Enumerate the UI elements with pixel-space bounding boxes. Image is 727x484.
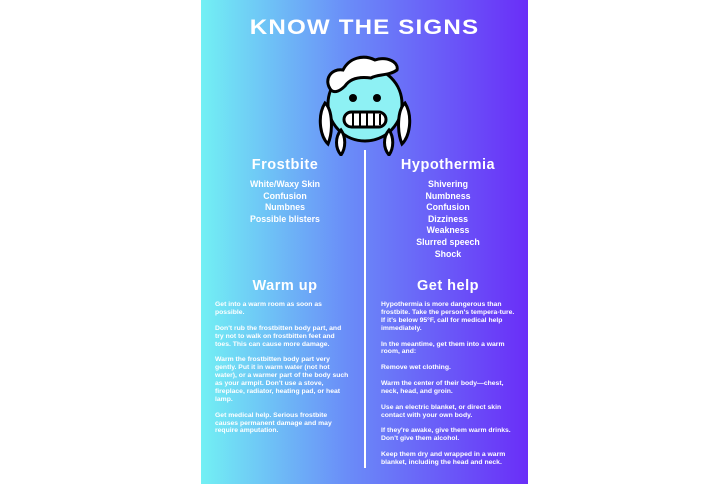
text: get help: Warm the center of their body—chest, neck, head, and groin. — [381, 380, 504, 395]
text: get help: Hypothermia is more dangerous than frostbite. Take the person's tempera-ture. If it's below 95°F, call for medical help immediately. — [381, 301, 514, 332]
list: hypothermia signs: Slurred speech — [416, 237, 480, 247]
text: get help: Keep them dry and wrapped in a warm blanket, including the head and neck. — [381, 451, 505, 466]
text: warm up: Don't rub the frostbitten body part, and try not to walk on frostbitten feet and toes. This can cause more damage. — [215, 325, 341, 348]
list: hypothermia signs: Shock — [435, 249, 461, 259]
panel: background — [201, 0, 528, 484]
list: hypothermia signs — [416, 179, 480, 259]
list: frostbite signs: White/Waxy Skin — [250, 179, 320, 189]
list: frostbite signs — [250, 179, 320, 224]
list: hypothermia signs: Weakness — [427, 225, 469, 235]
list: frostbite signs: Possible blisters — [250, 214, 320, 224]
heading: Hypothermia: Hypothermia — [401, 157, 495, 173]
list: hypothermia signs: Dizziness — [428, 214, 468, 224]
text: warm up: Warm the frostbitten body part very gently. Put it in warm water (not hot water), or a warmer part of the body such as your armpit. Don't use a stove, fireplace, radiator, heating pad, or heat lamp. — [215, 356, 348, 403]
text: warm up: Get into a warm room as soon as possible. — [215, 301, 322, 316]
list: hypothermia signs: Shivering — [428, 179, 468, 189]
text: warm up — [215, 301, 348, 434]
text: get help: If they're awake, give them warm drinks. Don't give them alcohol. — [381, 427, 511, 442]
text: warm up: Get medical help. Serious frostbite causes permanent damage and may require amputation. — [215, 412, 332, 434]
text: get help: Use an electric blanket, or direct skin contact with your own body. — [381, 404, 501, 419]
heading: Get help: Get help — [417, 278, 479, 294]
list: frostbite signs: Numbnes — [265, 202, 305, 212]
heading: Frostbite: Frostbite — [252, 157, 318, 173]
icon: freezing face — [318, 56, 412, 156]
list: hypothermia signs: Confusion — [426, 202, 470, 212]
text: get help: Remove wet clothing. — [381, 364, 451, 371]
divider line — [364, 150, 366, 468]
heading: Warm up: Warm up — [252, 278, 318, 294]
list: hypothermia signs: Numbness — [426, 191, 470, 201]
text: get help: In the meantime, get them into a warm room, and: — [381, 341, 504, 355]
title: KNOW THE SIGNS — [250, 16, 479, 39]
text: get help — [381, 301, 514, 466]
list: frostbite signs: Confusion — [263, 191, 307, 201]
